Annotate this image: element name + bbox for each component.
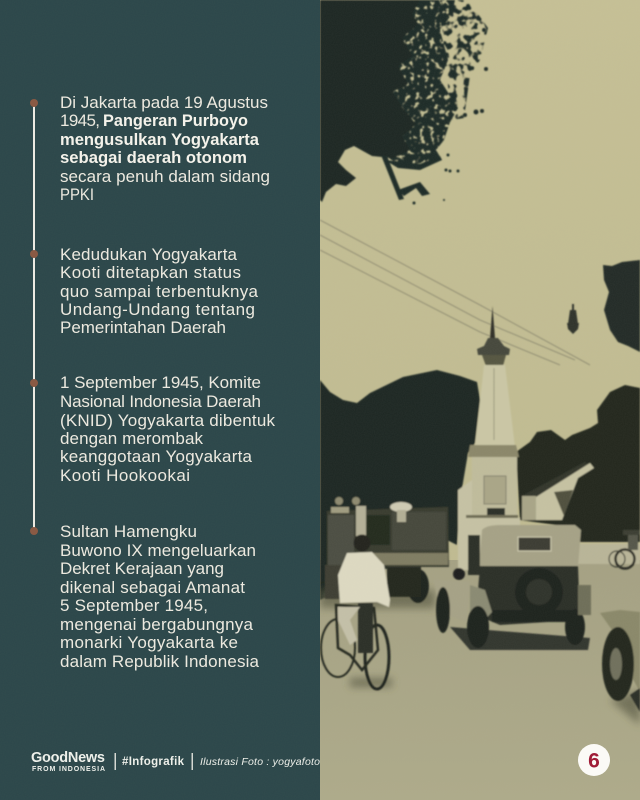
road shadows <box>320 590 640 725</box>
text block 3: (KNID) Yogyakarta dibentuk <box>60 411 276 430</box>
panel: dark teal text panel <box>0 0 320 800</box>
photo film grain <box>321 2 638 695</box>
footer <box>32 751 320 771</box>
text block 2: Kedudukan Yogyakarta <box>60 245 238 264</box>
text block 1: Di Jakarta pada 19 Agustus <box>60 93 268 112</box>
text block 2 <box>60 245 259 337</box>
photo credit: Ilustrasi Foto : yogyafoto <box>200 756 320 768</box>
truck <box>325 497 449 603</box>
street lamp <box>567 304 579 334</box>
text block 2: Kooti ditetapkan status <box>60 263 241 282</box>
text block 2: Undang-Undang tentang <box>60 300 255 319</box>
cyclist <box>321 534 390 689</box>
timeline dot 1 <box>30 99 38 107</box>
text block 4: Dekret Kerajaan yang <box>60 559 224 578</box>
text block 1: PPKI <box>60 185 94 204</box>
text block 3: Kooti Hookookai <box>60 466 190 485</box>
colonial house <box>522 462 594 520</box>
text block 2: Pemerintahan Daerah <box>60 318 226 337</box>
power lines <box>320 220 590 365</box>
text block 4: dikenal sebagai Amanat <box>60 578 245 597</box>
text block 1: 1945, <box>60 111 100 130</box>
timeline dot 4 <box>30 527 38 535</box>
car at right edge <box>600 610 640 712</box>
text block 4: 5 September 1945, <box>60 596 208 615</box>
text block 4: dalam Republik Indonesia <box>60 652 260 671</box>
text block 3: Nasional Indonesia Daerah <box>60 392 261 411</box>
timeline line <box>33 103 35 531</box>
timeline dot 2 <box>30 250 38 258</box>
text block 1: sebagai daerah otonom <box>60 149 247 167</box>
timeline dot 3 <box>30 379 38 387</box>
timeline <box>30 99 38 535</box>
dark trees right of tower <box>516 385 640 542</box>
text block 4 <box>60 522 260 671</box>
text block 3: 1 September 1945, Komite <box>60 373 261 392</box>
text block 2: quo sampai terbentuknya <box>60 282 259 301</box>
page number badge <box>578 744 610 776</box>
wall and rickshaw <box>577 530 640 568</box>
Tugu tower <box>458 306 520 570</box>
text block 1: secara penuh dalam sidang <box>60 167 270 186</box>
text block 4: mengenai bergabungnya <box>60 615 254 634</box>
text block 3 <box>60 373 276 485</box>
text block 4: Sultan Hamengku <box>60 522 197 541</box>
hashtag: #Infografik <box>122 756 185 768</box>
car <box>434 525 591 650</box>
photo road <box>320 560 640 800</box>
panel: background photo of Tugu Yogyakarta street scene <box>320 0 640 800</box>
top left tree <box>320 0 488 204</box>
photo sky <box>320 0 640 570</box>
text block 3: keanggotaan Yogyakarta <box>60 447 253 466</box>
dark trees left of tower <box>320 370 480 600</box>
photo contents <box>320 0 640 725</box>
text block 4: monarki Yogyakarta ke <box>60 633 238 652</box>
text block 1: mengusulkan Yogyakarta <box>60 131 260 149</box>
text block 3: dengan merombak <box>60 429 204 448</box>
logo: GoodNews from Indonesia: FROM INDONESIA <box>32 766 105 773</box>
page number badge: 6 <box>588 750 600 772</box>
text block 1: Pangeran Purboyo <box>103 112 248 130</box>
logo: GoodNews from Indonesia: GoodNews <box>31 750 105 766</box>
top right tree <box>603 260 640 352</box>
text block 4: Buwono IX mengeluarkan <box>60 541 256 560</box>
text block 1 <box>60 93 270 204</box>
divider two <box>192 753 193 770</box>
divider one <box>114 753 116 770</box>
